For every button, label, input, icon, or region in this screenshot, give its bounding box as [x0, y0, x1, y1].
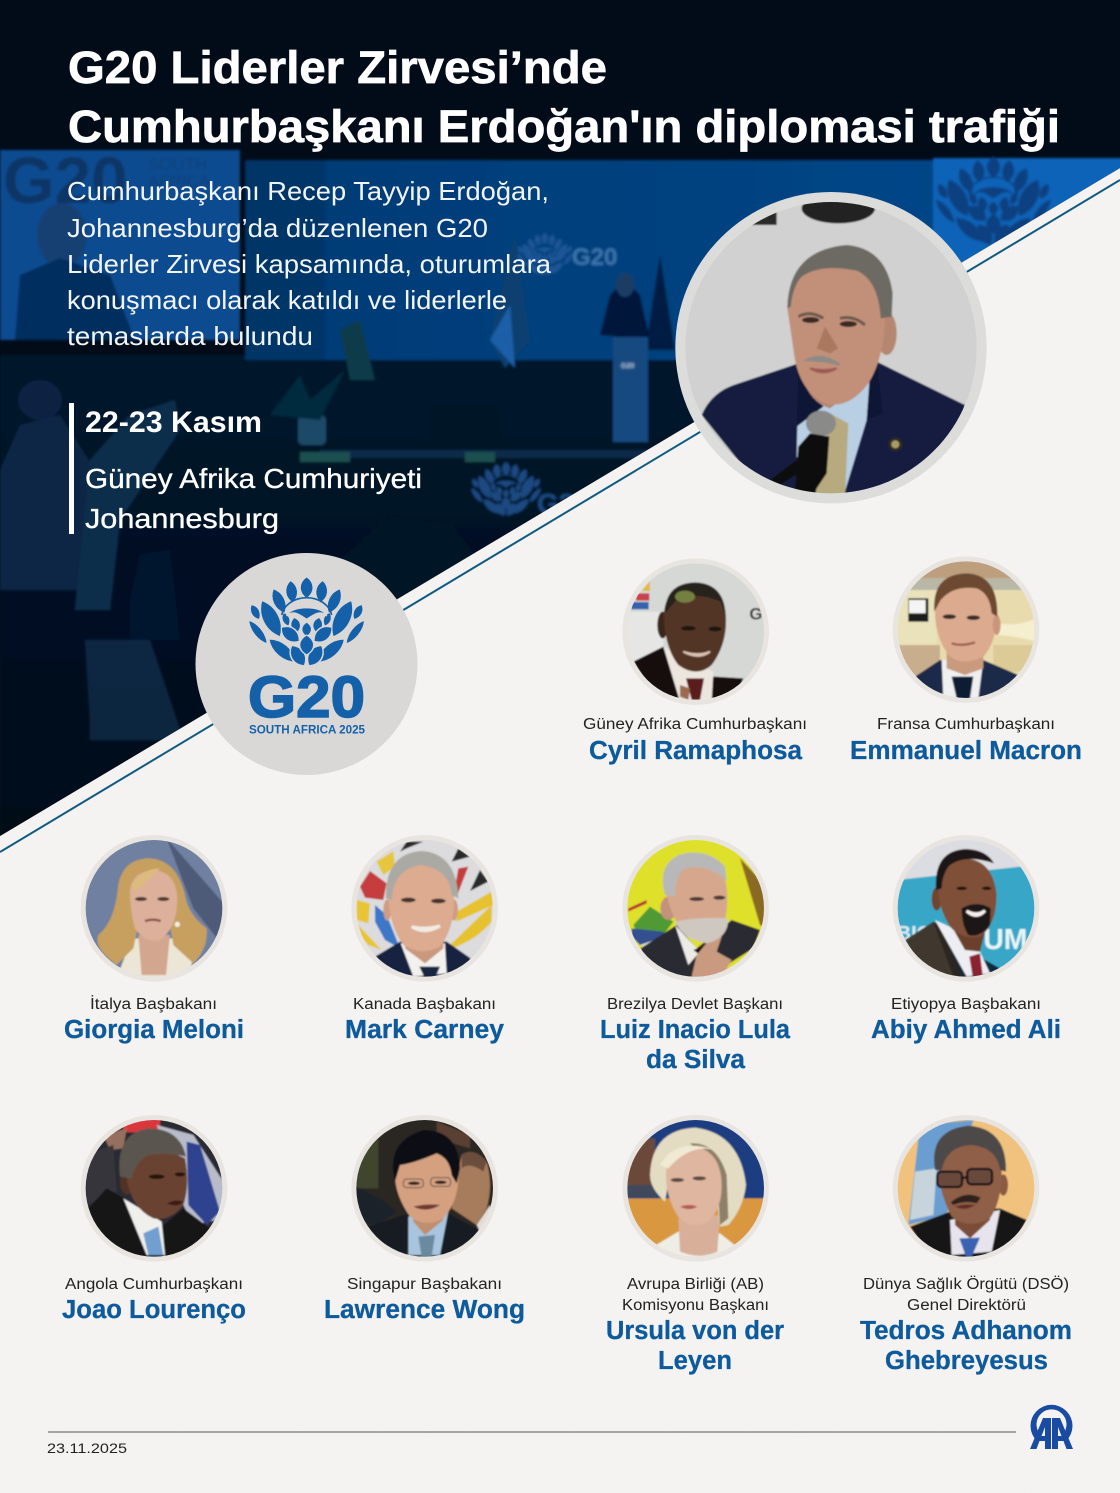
date and location block: Johannesburg	[85, 503, 279, 534]
photo background: summit stage in navy duotone: G2	[537, 488, 574, 519]
date and location block: 22-23 Kasım	[85, 406, 262, 439]
portrait: Abiy Ahmed: UM	[983, 924, 1027, 956]
portrait: Ramaphosa	[622, 558, 769, 705]
leader: Tedros Adhanom Ghebreyesus: Tedros Adhanom	[860, 1317, 1072, 1345]
portrait: Abiy Ahmed	[893, 835, 1039, 982]
portrait: Lula	[622, 835, 769, 982]
leader: Ursula von der Leyen: Leyen	[658, 1347, 732, 1375]
leader: Cyril Ramaphosa: Güney Afrika Cumhurbaşkanı	[583, 716, 807, 733]
leader: Cyril Ramaphosa: Cyril Ramaphosa	[589, 737, 803, 765]
leader: Emmanuel Macron: Emmanuel Macron	[850, 737, 1082, 765]
leader: Giorgia Meloni	[64, 835, 244, 1044]
leader: Joao Lourenço: Angola Cumhurbaşkanı	[65, 1276, 243, 1293]
leader: Cyril Ramaphosa	[583, 558, 807, 765]
leader: Mark Carney: Kanada Başbakanı	[353, 996, 496, 1013]
leader: Tedros Adhanom Ghebreyesus: Ghebreyesus	[885, 1347, 1048, 1375]
portrait: von der Leyen	[622, 1115, 769, 1262]
date and location block: Güney Afrika Cumhuriyeti	[85, 463, 422, 494]
leader: Lawrence Wong: Lawrence Wong	[324, 1296, 525, 1324]
portrait: Macron	[893, 556, 1039, 703]
portrait: Abiy Ahmed: BIC	[897, 923, 931, 945]
G20 logo badge: SOUTH AFRICA 2025	[249, 722, 365, 736]
intro text: Cumhurbaşkanı Recep Tayyip Erdoğan,	[67, 176, 549, 206]
title: Cumhurbaşkanı Erdoğan'ın diplomasi trafiği	[68, 101, 1060, 152]
icon: AA logo	[1030, 1405, 1073, 1449]
portrait: Carney	[351, 835, 498, 982]
leader: Luiz Inacio Lula da Silva: da Silva	[646, 1046, 746, 1074]
portrait: Erdoğan	[675, 192, 987, 503]
leader: Abiy Ahmed Ali: Abiy Ahmed Ali	[871, 1016, 1061, 1044]
leader: Lawrence Wong	[324, 1115, 525, 1324]
leader: Joao Lourenço	[62, 1115, 246, 1324]
date and location block	[69, 403, 422, 534]
leader: Ursula von der Leyen: Komisyonu Başkanı	[622, 1297, 769, 1314]
leader: Lawrence Wong: Singapur Başbakanı	[347, 1276, 502, 1293]
leader: Ursula von der Leyen: Ursula von der	[606, 1317, 784, 1345]
leader: Luiz Inacio Lula da Silva: Luiz Inacio Lula	[600, 1016, 791, 1044]
intro text: Johannesburg’da düzenlenen G20	[67, 213, 488, 243]
portrait: Wong	[351, 1115, 498, 1262]
photo background: summit stage in navy duotone: G20	[621, 363, 634, 370]
leader: Mark Carney: Mark Carney	[345, 1016, 505, 1044]
title	[68, 42, 1060, 152]
leader: Abiy Ahmed Ali: Etiyopya Başbakanı	[891, 996, 1041, 1013]
leader: Abiy Ahmed Ali	[871, 835, 1061, 1044]
leader: Emmanuel Macron: Fransa Cumhurbaşkanı	[877, 716, 1055, 733]
photo background: summit stage in navy duotone: AFRICA	[148, 172, 211, 191]
leader: Joao Lourenço: Joao Lourenço	[62, 1296, 246, 1324]
portrait: Ramaphosa: G	[749, 605, 762, 624]
diagonal accent line	[0, 180, 1120, 852]
leader: Emmanuel Macron	[850, 556, 1082, 765]
leader: Luiz Inacio Lula da Silva	[600, 835, 791, 1074]
G20 logo badge: G20	[248, 665, 365, 730]
photo background: summit stage in navy duotone	[0, 0, 1120, 850]
footer rule	[48, 1431, 1016, 1433]
leader: Ursula von der Leyen	[606, 1115, 784, 1375]
G20 logo badge	[196, 553, 418, 775]
intro text: Liderler Zirvesi kapsamında, oturumlara	[67, 249, 552, 279]
leader: Luiz Inacio Lula da Silva: Brezilya Devlet Başkanı	[607, 996, 783, 1013]
leader: Giorgia Meloni: İtalya Başbakanı	[90, 995, 217, 1013]
portrait: Tedros	[893, 1115, 1039, 1262]
intro text: konuşmacı olarak katıldı ve liderlerle	[67, 285, 507, 315]
leader: Tedros Adhanom Ghebreyesus: Genel Direktörü	[907, 1297, 1026, 1314]
photo background: summit stage in navy duotone: SOUTH	[148, 155, 208, 174]
leader: Tedros Adhanom Ghebreyesus: Dünya Sağlık Örgütü (DSÖ)	[863, 1275, 1069, 1293]
portrait: Lourenço	[81, 1115, 227, 1262]
leader: Mark Carney	[345, 835, 505, 1044]
photo background: summit stage in navy duotone: G20	[3, 143, 128, 217]
leader: Tedros Adhanom Ghebreyesus	[860, 1115, 1072, 1375]
intro text	[67, 176, 552, 351]
portrait: Meloni	[81, 835, 227, 982]
intro text: temaslarda bulundu	[67, 321, 313, 351]
title: G20 Liderler Zirvesi’nde	[68, 42, 607, 93]
photo background: summit stage in navy duotone: G20	[572, 244, 617, 271]
leader: Ursula von der Leyen: Avrupa Birliği (AB)	[627, 1276, 764, 1293]
footer date: 23.11.2025	[47, 1440, 127, 1456]
leader: Giorgia Meloni: Giorgia Meloni	[64, 1016, 244, 1044]
